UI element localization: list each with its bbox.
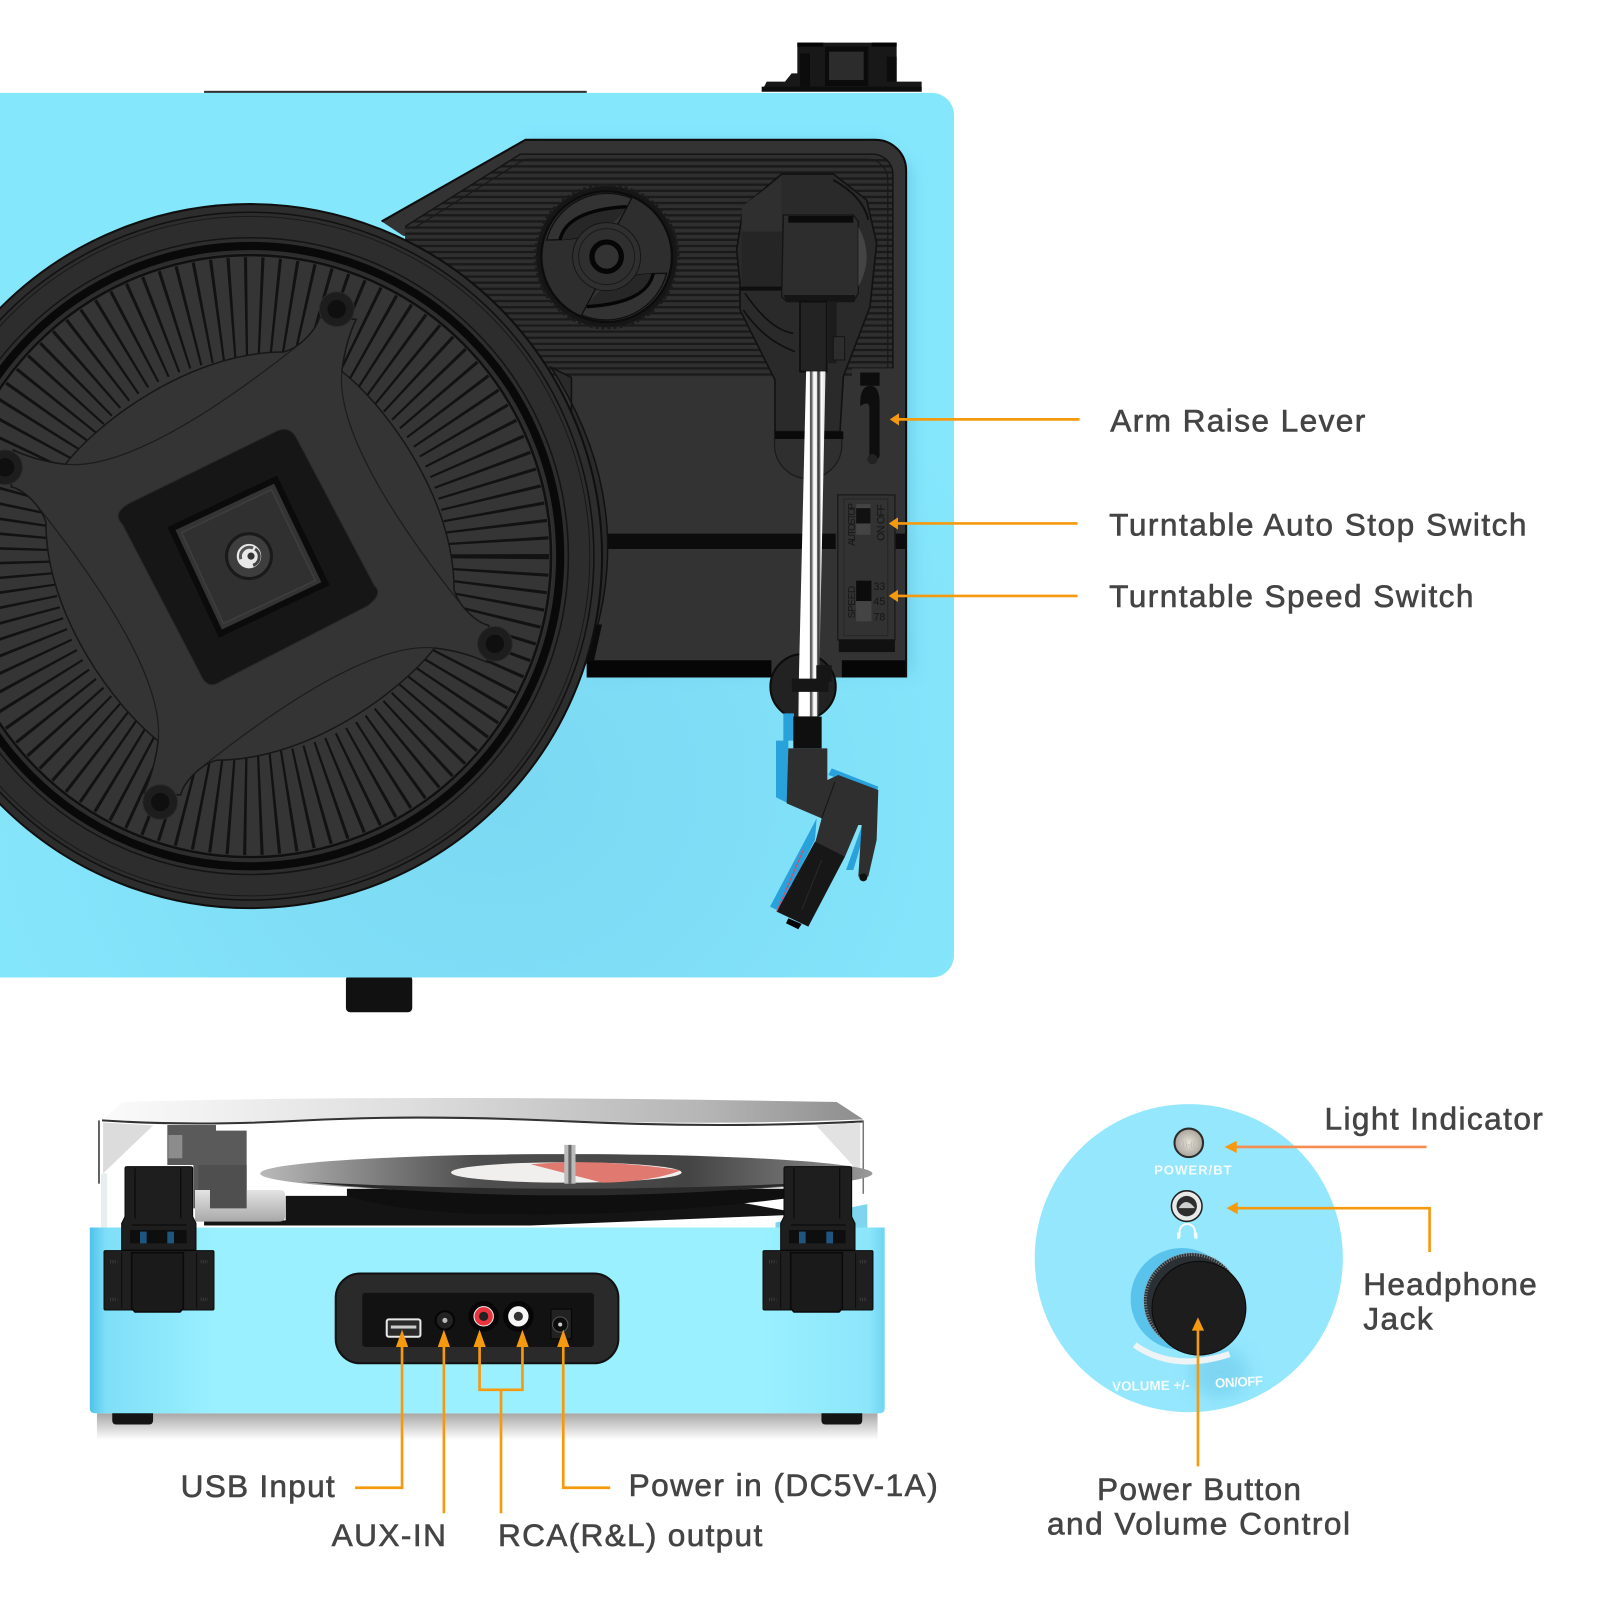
auto stop switch [847,503,888,546]
lower knob shadow [1191,1348,1248,1397]
volume text: VOLUME +/- [1112,1377,1190,1394]
arrow: auto stop switch [889,517,1078,530]
label: power in: Power in (DC5V-1A) [629,1467,938,1503]
arrow: light indicator [1224,1141,1427,1153]
label: power button and volume control: and Volume Control [1047,1506,1350,1542]
tonearm assembly [737,174,877,719]
speed switch: SPEED [847,586,858,618]
arm raise lever [860,372,880,464]
cartridge and headshell [770,713,878,929]
panel: rear view of turntable [90,1098,885,1440]
ghost tonearm [167,1125,285,1222]
speed switch: 78 [873,611,885,623]
AUX port [436,1311,454,1330]
arrow: USB [355,1330,408,1488]
counterweight block [782,215,867,302]
knob shadow [1131,1248,1233,1350]
centre diamond [118,429,378,685]
record [260,1145,872,1214]
reel: record adapter holder [535,185,678,328]
panel: turntable top deck [0,93,954,978]
DC port [551,1309,571,1339]
label: headphone jack: Jack [1363,1301,1433,1337]
speed switch: 45 [873,596,885,608]
spindle [227,534,271,579]
label: power button and volume control: Power Button [1097,1471,1301,1507]
ribbed area [404,154,894,376]
rear foot strip [204,91,587,93]
panel: tonearm base plate [382,140,906,678]
arrow: arm raise lever [890,413,1080,426]
label: RCA: RCA(R&L) output [498,1517,762,1553]
platter rim crescent [551,367,608,663]
tonearm body [737,174,877,439]
screws [0,292,512,819]
soft shadow of tonearm plate [526,140,913,673]
headphone icon [1179,1224,1196,1239]
auto stop switch: AUTOSTOP [847,503,858,546]
inner square [171,480,326,634]
body front [90,1228,885,1413]
speed switch: 33 [873,581,885,593]
volume arc [1135,1345,1230,1361]
radial fins [0,253,553,859]
arrow: speed switch [889,590,1078,602]
label: AUX: AUX-IN [332,1517,446,1553]
platter edge dark patch [586,624,602,661]
speed switch [847,581,885,623]
front knob [346,976,412,1012]
right hinge [763,1167,873,1312]
arm tube [798,371,826,716]
hinge: top view [762,43,922,92]
label: headphone jack: Headphone [1363,1266,1537,1302]
arrow: power in [557,1330,610,1488]
pivot rest [770,654,836,719]
POWER/BT text: POWER/BT [1154,1162,1232,1177]
label: speed switch: Turntable Speed Switch [1109,578,1473,614]
RCA red [468,1301,499,1332]
on/off text: ON/OFF [1215,1373,1263,1391]
left hinge [104,1167,214,1312]
light indicator [1174,1129,1203,1157]
headphone jack [1171,1191,1202,1221]
dust cover [99,1098,863,1235]
port panel [336,1273,618,1363]
hub cross [11,317,489,795]
platter [0,204,602,908]
feet [112,1412,862,1424]
RCA white [503,1301,534,1332]
auto stop switch: ON OFF [876,504,888,541]
light indicator: ))-(( [1182,1140,1196,1149]
lower arm cup [774,432,842,479]
arrow: AUX [438,1330,450,1513]
knob [1144,1253,1246,1355]
deck base [776,1204,867,1228]
panel: control knob close-up [1035,1104,1343,1412]
label: USB: USB Input [181,1468,335,1504]
label: light indicator: Light Indicator [1324,1101,1543,1137]
arrow: power button [1192,1317,1204,1466]
USB port [387,1319,420,1337]
label: auto stop switch: Turntable Auto Stop Switch [1109,507,1527,543]
label: arm raise lever: Arm Raise Lever [1110,403,1365,439]
ground shadow [97,1413,878,1440]
switch panel [838,495,895,652]
arrow: RCA [473,1330,529,1513]
arrow: headphone jack [1227,1202,1430,1252]
